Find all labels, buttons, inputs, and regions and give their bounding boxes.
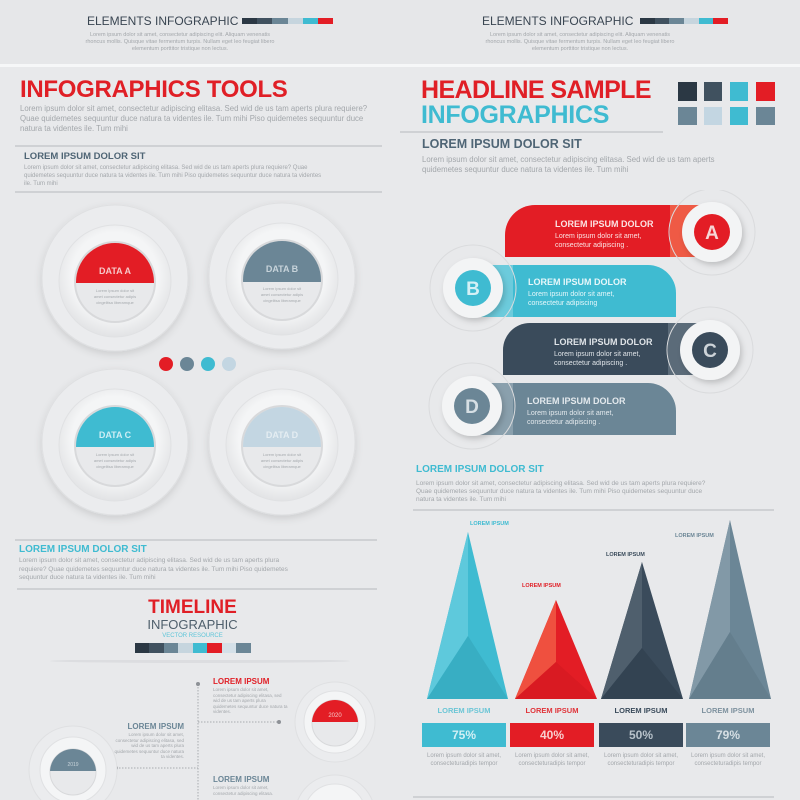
timeline label 2020: Lorem ipsum dolor sit amet, consectetur adipiscing elitasa, sed wid de us tam aperts plura quidemetes sequuntur duce natura ta videntes. xyxy=(213,687,288,714)
timeline heading: TIMELINE xyxy=(148,597,237,618)
stat 1: 75% xyxy=(452,728,476,742)
banner D: D xyxy=(465,397,479,418)
banner C: LOREM IPSUM DOLOR xyxy=(554,337,653,347)
headline right: HEADLINE SAMPLE xyxy=(421,76,651,104)
circle C: Lorem ipsum dolor sit xyxy=(96,452,135,457)
text pyramid: Lorem ipsum dolor sit amet, consectetur adipiscing elitasa. Sed wid de us tam aperts plura requiere? Quae quidemetes sequuntur duce natura ta videntes ile. Tum mihi Piso quidemetes sequuntur duce natura ta videntes ile. Tum mihi xyxy=(416,480,705,503)
circle D: DATA D xyxy=(266,430,299,440)
header text left: Lorem ipsum dolor sit amet, consectetur adipiscing elit. Aliquam venenatis rhoncus mollis. Quisque vitae fermentum turpis. Nullam eget leo feugiat libero elementum porttitor tristique non lectus. xyxy=(86,32,274,52)
stat 4: Lorem ipsum dolor sit amet, consecteturadipis tempor xyxy=(691,753,765,767)
pyramid labels: LOREM IPSUM xyxy=(606,552,645,558)
banner D: LOREM IPSUM DOLOR xyxy=(527,396,626,406)
circle panel: data circles xyxy=(40,202,358,520)
circle B: DATA B xyxy=(266,264,299,274)
banner B xyxy=(430,245,676,331)
intro text left: Lorem ipsum dolor sit amet, consectetur adipiscing elitasa. Sed wid de us tam aperts plura requiere? Quae quidemetes sequuntur duce natura ta videntes ile. Tum mihi Piso quidemetes sequuntur duce natura ta videntes ile. Tum mihi xyxy=(20,104,367,133)
title: infographics tools: INFOGRAPHICS TOOLS xyxy=(20,76,288,103)
circle C xyxy=(42,369,188,515)
headline subtitle: INFOGRAPHICS xyxy=(421,101,609,129)
banner C xyxy=(503,307,753,393)
circle C: cingelitsa liberamque xyxy=(96,464,135,469)
banner A: A xyxy=(705,223,719,244)
timeline title block xyxy=(135,597,251,653)
subtext left: Lorem ipsum dolor sit amet, consectetur adipiscing elitasa. Sed wid de us tam aperts plura requiere? Quae quidemetes sequuntur duce natura ta videntes ile. Tum mihi Piso quidemetes sequuntur duce natura ta videntes ile. Tum mihi xyxy=(24,165,321,187)
timeline label 2019: LOREM IPSUM xyxy=(128,722,184,731)
timeline label 3: LOREM IPSUM xyxy=(213,775,269,784)
stat 4: 79% xyxy=(716,728,740,742)
banner A: Lorem ipsum dolor sit amet, xyxy=(555,233,641,240)
banner C: C xyxy=(703,341,717,362)
circle D: amet consectetur adipis xyxy=(261,458,303,463)
banner B: B xyxy=(466,279,480,300)
pyramid labels xyxy=(470,521,714,589)
banner list xyxy=(428,190,756,450)
circle B: Lorem ipsum dolor sit xyxy=(263,286,302,291)
top band xyxy=(0,0,800,67)
pyramid labels: LOREM IPSUM xyxy=(470,521,509,527)
pyramid 2 xyxy=(515,600,597,699)
banner B: Lorem ipsum dolor sit amet, xyxy=(528,291,614,298)
timeline colour bar xyxy=(135,643,251,653)
timeline node 2019: 2019 xyxy=(67,762,79,768)
stat 2: 40% xyxy=(540,728,564,742)
circle C: DATA C xyxy=(99,430,132,440)
circle A: Lorem ipsum dolor sit xyxy=(96,288,135,293)
banner C: Lorem ipsum dolor sit amet, xyxy=(554,351,640,358)
circle A: DATA A xyxy=(99,266,131,276)
stats row xyxy=(422,706,770,767)
colour squares xyxy=(678,82,775,125)
pyramid 3 xyxy=(601,562,683,699)
timeline label 2019: Lorem ipsum dolor sit amet, consectetur adipiscing elitasa, sed wid de us tam aperts plura quidemetes sequuntur duce natura ta videntes. xyxy=(114,732,184,759)
timeline node 3 xyxy=(295,775,375,800)
stat 1 xyxy=(422,706,506,767)
subheading left: LOREM IPSUM DOLOR SIT xyxy=(24,151,145,162)
stat 4: LOREM IPSUM xyxy=(702,706,754,715)
timeline title block: VECTOR RESOURCE xyxy=(162,633,223,639)
banner D: Lorem ipsum dolor sit amet, xyxy=(527,410,613,417)
pyramid 1 xyxy=(427,532,508,699)
timeline label 3: Lorem ipsum dolor sit amet, consectetur adipiscing elitasa. xyxy=(213,785,273,796)
header title left: ELEMENTS INFOGRAPHIC xyxy=(87,14,238,28)
timeline node 2019 xyxy=(29,726,117,800)
pyramid 4 xyxy=(689,520,771,699)
banner C: consectetur adipiscing . xyxy=(554,360,627,367)
circle A: amet consectetur adipis xyxy=(94,294,136,299)
timeline node 2020: 2020 xyxy=(328,713,342,719)
circle B xyxy=(209,203,355,349)
banner D: consectetur adipiscing . xyxy=(527,419,600,426)
colour bar right xyxy=(640,18,728,24)
circle D: cingelitsa liberamque xyxy=(263,464,302,469)
pyramid labels: LOREM IPSUM xyxy=(522,583,561,589)
timeline subheading: INFOGRAPHIC xyxy=(147,617,238,632)
stat 2: LOREM IPSUM xyxy=(526,706,578,715)
timeline node 2020 xyxy=(295,682,375,762)
header right xyxy=(482,14,728,52)
stat 2 xyxy=(510,706,594,767)
stat 3 xyxy=(599,706,683,767)
stat 2: Lorem ipsum dolor sit amet, consecteturadipis tempor xyxy=(515,753,589,767)
header title right: ELEMENTS INFOGRAPHIC xyxy=(482,14,633,28)
pyramid chart xyxy=(427,520,771,699)
colour bar left xyxy=(242,18,333,24)
timeline chart xyxy=(28,660,376,800)
banner D xyxy=(429,363,676,449)
banner A: consectetur adipiscing . xyxy=(555,242,628,249)
header text right: Lorem ipsum dolor sit amet, consectetur adipiscing elit. Aliquam venenatis rhoncus mollis. Quisque vitae fermentum turpis. Nullam eget leo feugiat libero elementum porttitor tristique non lectus. xyxy=(486,32,674,52)
header left xyxy=(86,14,333,52)
stat 3: Lorem ipsum dolor sit amet, consecteturadipis tempor xyxy=(604,753,678,767)
dots xyxy=(159,357,236,371)
text left bottom: Lorem ipsum dolor sit amet, consectetur adipiscing elitasa. Sed wid de us tam aperts plura requiere? Quae quidemetes sequuntur duce natura ta videntes ile. Tum mihi Piso quidemetes sequuntur duce natura ta videntes ile. Tum mihi xyxy=(19,557,288,581)
circle D xyxy=(209,369,355,515)
timeline label 3 xyxy=(213,775,273,796)
subheading left bottom: LOREM IPSUM DOLOR SIT xyxy=(19,544,147,555)
stat 4 xyxy=(686,706,770,767)
banner B: consectetur adipiscing xyxy=(528,300,597,307)
circle B: cingelitsa liberamque xyxy=(263,298,302,303)
banner A xyxy=(505,189,755,275)
text right: Lorem ipsum dolor sit amet, consectetur adipiscing elitasa. Sed wid de us tam aperts quidemetes sequuntur duce natura ta videntes ile. Tum mihi xyxy=(422,155,715,174)
timeline label 2020: LOREM IPSUM xyxy=(213,677,269,686)
circle B: amet consectetur adipis xyxy=(261,292,303,297)
circle C: amet consectetur adipis xyxy=(94,458,136,463)
pyramid labels: LOREM IPSUM xyxy=(675,533,714,539)
subheading right: LOREM IPSUM DOLOR SIT xyxy=(422,137,582,151)
stat 3: LOREM IPSUM xyxy=(615,706,667,715)
circle A xyxy=(42,205,188,351)
subheading pyramid: LOREM IPSUM DOLOR SIT xyxy=(416,464,544,475)
stat 3: 50% xyxy=(629,728,653,742)
stat 1: Lorem ipsum dolor sit amet, consecteturadipis tempor xyxy=(427,753,501,767)
stat 1: LOREM IPSUM xyxy=(438,706,490,715)
circle D: Lorem ipsum dolor sit xyxy=(263,452,302,457)
circle A: cingelitsa liberamque xyxy=(96,300,135,305)
banner B: LOREM IPSUM DOLOR xyxy=(528,277,627,287)
banner A: LOREM IPSUM DOLOR xyxy=(555,219,654,229)
